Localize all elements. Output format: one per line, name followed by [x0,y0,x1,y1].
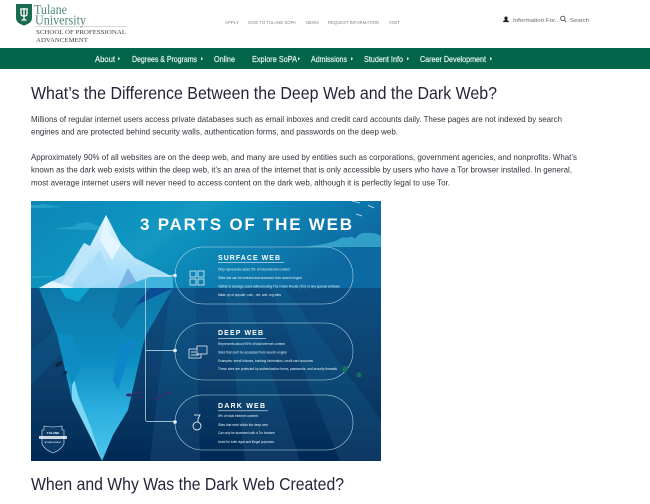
wordmark: Tulane University [34,2,86,28]
sky background [31,201,381,288]
panel: surface web: Made up of popular .com, .net, and .org sites [218,293,281,297]
panel: surface web [175,247,353,304]
utility links: NEWS [306,20,319,25]
light rays [31,288,381,461]
paragraph: deep web intro: Millions of regular internet users access private databases such as email inboxes and credit card accounts daily. These pages are not indexed by search [31,114,562,124]
panel: surface web: Only represents about 5% of total internet content [218,268,290,272]
school name: ADVANCEMENT [36,37,88,44]
green navigation bar: Explore SoPA [252,54,297,64]
infographic: 3 parts of the web [31,201,381,461]
panel: dark web: Used for both legal and illegal purposes [218,440,274,444]
header: logo [16,2,126,44]
icon: surface web [190,271,204,285]
school name [36,29,126,44]
green navigation bar: Admissions [311,54,347,64]
connector lines [146,274,176,424]
title: 3 PARTS OF THE WEB [140,215,352,234]
utility links: GIVE TO TULANE SOPA [248,20,296,25]
heading: when and why: When and Why Was the Dark Web Created? [31,474,344,494]
panel: deep web: Sites that can’t be accessed from search engine [218,350,287,354]
sea background [31,288,381,461]
information for and search [503,16,589,24]
utility links: APPLY [225,20,239,25]
green navigation bar: Career Development [420,54,487,64]
clouds [31,204,381,278]
panel: surface web: SURFACE WEB [218,255,280,262]
utility links: VISIT [389,20,400,25]
panel: dark web [175,395,353,450]
information for and search: Information For... [513,18,560,24]
panel: surface web: Sites that can be indexed and accessed from search engine [218,276,302,280]
birds [352,201,374,216]
wordmark: Tulane University: Tulane [34,2,67,17]
panel: deep web [175,323,353,380]
utility links: REQUEST INFORMATION [328,20,379,25]
panel: surface web: Visible to average users without using The Onion Router (Tor) or any special software [218,284,340,288]
panel: dark web: Sites that exist within the deep web [218,423,268,427]
school name: SCHOOL OF PROFESSIONAL [36,29,126,36]
heading: deep web vs dark web: What’s the Difference Between the Deep Web and the Dark Web? [31,83,497,103]
green navigation bar: Student Info [364,54,403,64]
utility links [225,20,400,25]
green navigation bar: About [95,54,116,64]
panel: deep web: Examples: email inboxes, banking information, credit card accounts [218,359,313,363]
panel: dark web: 5% of total internet content [218,414,258,418]
green navigation bar: Online [214,54,235,64]
paragraph: deep web intro [31,114,562,136]
green navigation bar: Degrees & Programs [132,54,197,64]
green fish [342,366,362,378]
badge: Tulane professional advancement [39,426,67,453]
paragraph: deep web intro: engines and are protected behind security walls, authentication forms, and passwords on the deep web. [31,126,398,136]
paragraph: dark web intro: most average internet users will never need to access content on the dark web, although it is perfectly legal to use Tor. [31,178,450,188]
icon: dark web [193,415,201,430]
paragraph: dark web intro: known as the dark web exists within the deep web, it’s an area of the internet that is only accessible by users who have a Tor browser installed. In general, [31,165,572,175]
badge: Tulane professional advancement: ADVANCEMENT [45,441,62,444]
wordmark: Tulane University: University [35,12,86,28]
iceberg below water [39,288,173,461]
paragraph: dark web intro [31,152,577,188]
panel: dark web: DARK WEB [218,403,265,410]
divers [54,360,68,376]
panel: dark web: Can only be accessed with a Tor browser [218,431,276,435]
badge: Tulane professional advancement: TULANE [47,431,59,435]
icon: deep web [189,346,207,358]
panel: deep web: Represents about 90% of total internet content [218,342,285,346]
icon: person [503,16,509,22]
icon: magnifier [561,16,566,22]
paragraph: dark web intro: Approximately 90% of all websites are on the deep web, and many are used by entities such as corporations, government agencies, and nonprofits. What’s [31,152,577,162]
panel: deep web: These sites are protected by authentication forms, passwords, and security firewalls [218,367,337,371]
fish school [126,392,172,400]
panel: deep web: DEEP WEB [218,330,263,337]
icon: Tulane shield [16,4,32,26]
information for and search: Search [570,18,589,24]
iceberg above water [39,215,173,288]
green navigation bar [0,48,650,69]
